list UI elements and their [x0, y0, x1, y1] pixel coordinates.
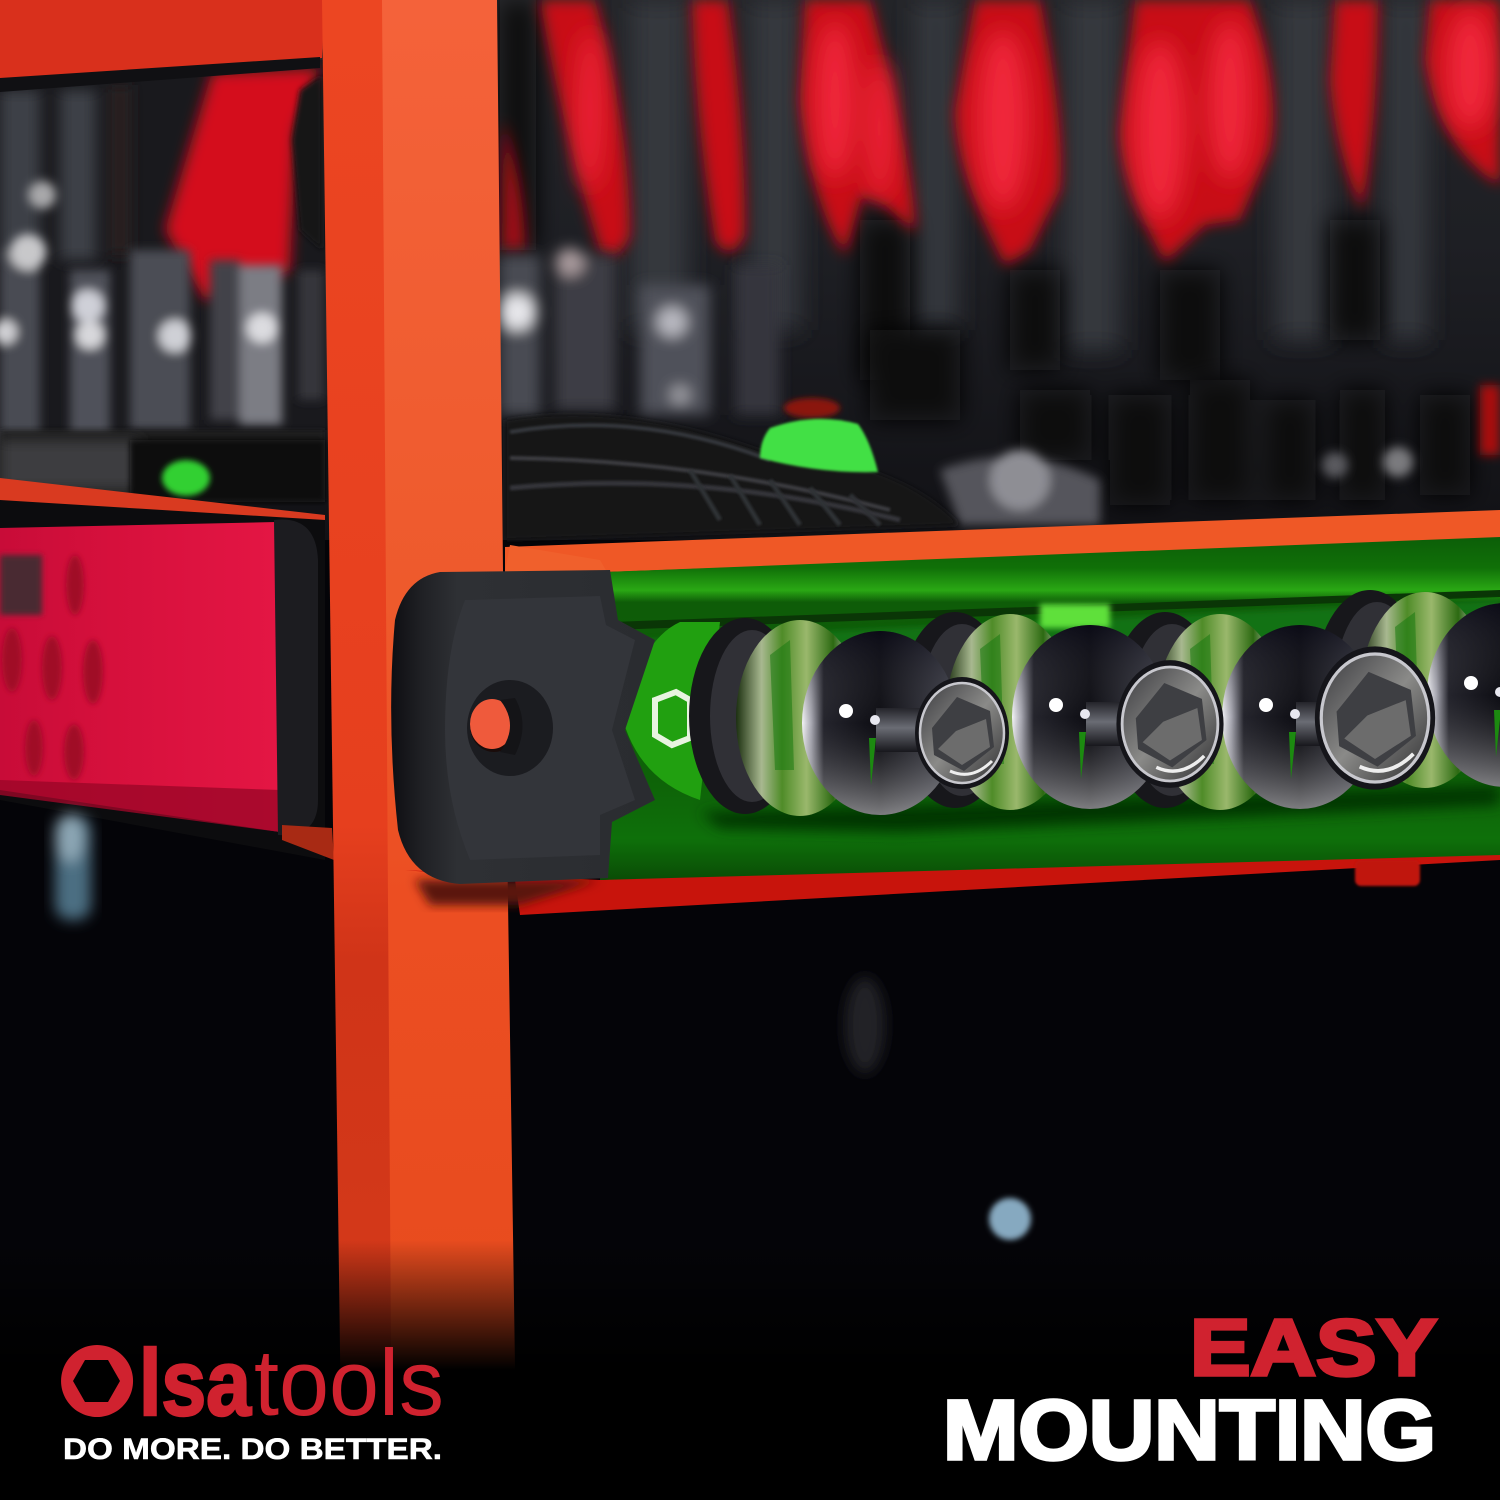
left window: crossbar and blurred sockets	[0, 0, 325, 502]
socket 1	[689, 618, 1009, 816]
orange vertical post	[322, 0, 517, 1500]
logo hex on rail	[655, 692, 690, 745]
bottom left glint	[55, 814, 91, 920]
heading	[943, 1303, 1437, 1477]
lower background glints	[845, 977, 1031, 1240]
heading line 2: MOUNTING	[943, 1383, 1436, 1477]
rail top lip shadow	[612, 590, 1500, 630]
heading line 1: EASY	[1190, 1303, 1437, 1392]
green socket rail	[600, 537, 1500, 880]
shelf top edge, orange	[505, 510, 1500, 572]
ratchet handle	[505, 398, 960, 540]
logo	[61, 1330, 444, 1466]
blurred red handle	[165, 68, 320, 300]
green button	[760, 419, 878, 472]
black mounting end cap	[391, 570, 655, 884]
top crossbar	[0, 0, 325, 80]
post front face	[382, 0, 517, 1500]
bright glow on rail	[1040, 604, 1110, 628]
logo wordmark bold: lsa	[139, 1330, 252, 1435]
red lower shelf strip	[405, 830, 1500, 915]
blurred chrome bits, right	[499, 248, 780, 415]
mounting hole	[467, 680, 553, 776]
post side face	[322, 0, 394, 1500]
red screwdriver blades	[502, 0, 1500, 265]
dark socket rows, right	[870, 330, 1470, 505]
grey chrome glow, lower right	[940, 385, 1500, 525]
lower-left shelf with red holder	[0, 478, 334, 860]
socket 1 opening	[915, 677, 1009, 789]
holder end cap	[274, 520, 318, 835]
red bit holder	[0, 522, 280, 832]
post shadow strip	[282, 825, 334, 860]
blade highlights	[578, 10, 1494, 220]
blurred chrome bits	[0, 181, 324, 450]
green backing behind sockets	[640, 600, 1500, 660]
socket 3 opening	[1315, 646, 1435, 790]
blurred dark handles	[630, 0, 1427, 350]
shelf edge	[0, 478, 325, 525]
socket 4, partially cropped	[1314, 590, 1500, 788]
black gaps	[500, 0, 1380, 380]
rail bottom shadow	[700, 785, 1500, 832]
socket 2	[899, 612, 1224, 810]
socket 2 opening	[1116, 660, 1224, 788]
socket 3	[1109, 612, 1435, 810]
holder holes	[2, 555, 103, 780]
tagline: DO MORE. DO BETTER.	[63, 1433, 442, 1466]
upper background: blurred tool rack	[0, 0, 1500, 540]
bottom fade to black	[0, 1240, 1500, 1370]
logo wordmark light: tools	[254, 1330, 444, 1435]
logo hexagon O	[61, 1345, 133, 1417]
